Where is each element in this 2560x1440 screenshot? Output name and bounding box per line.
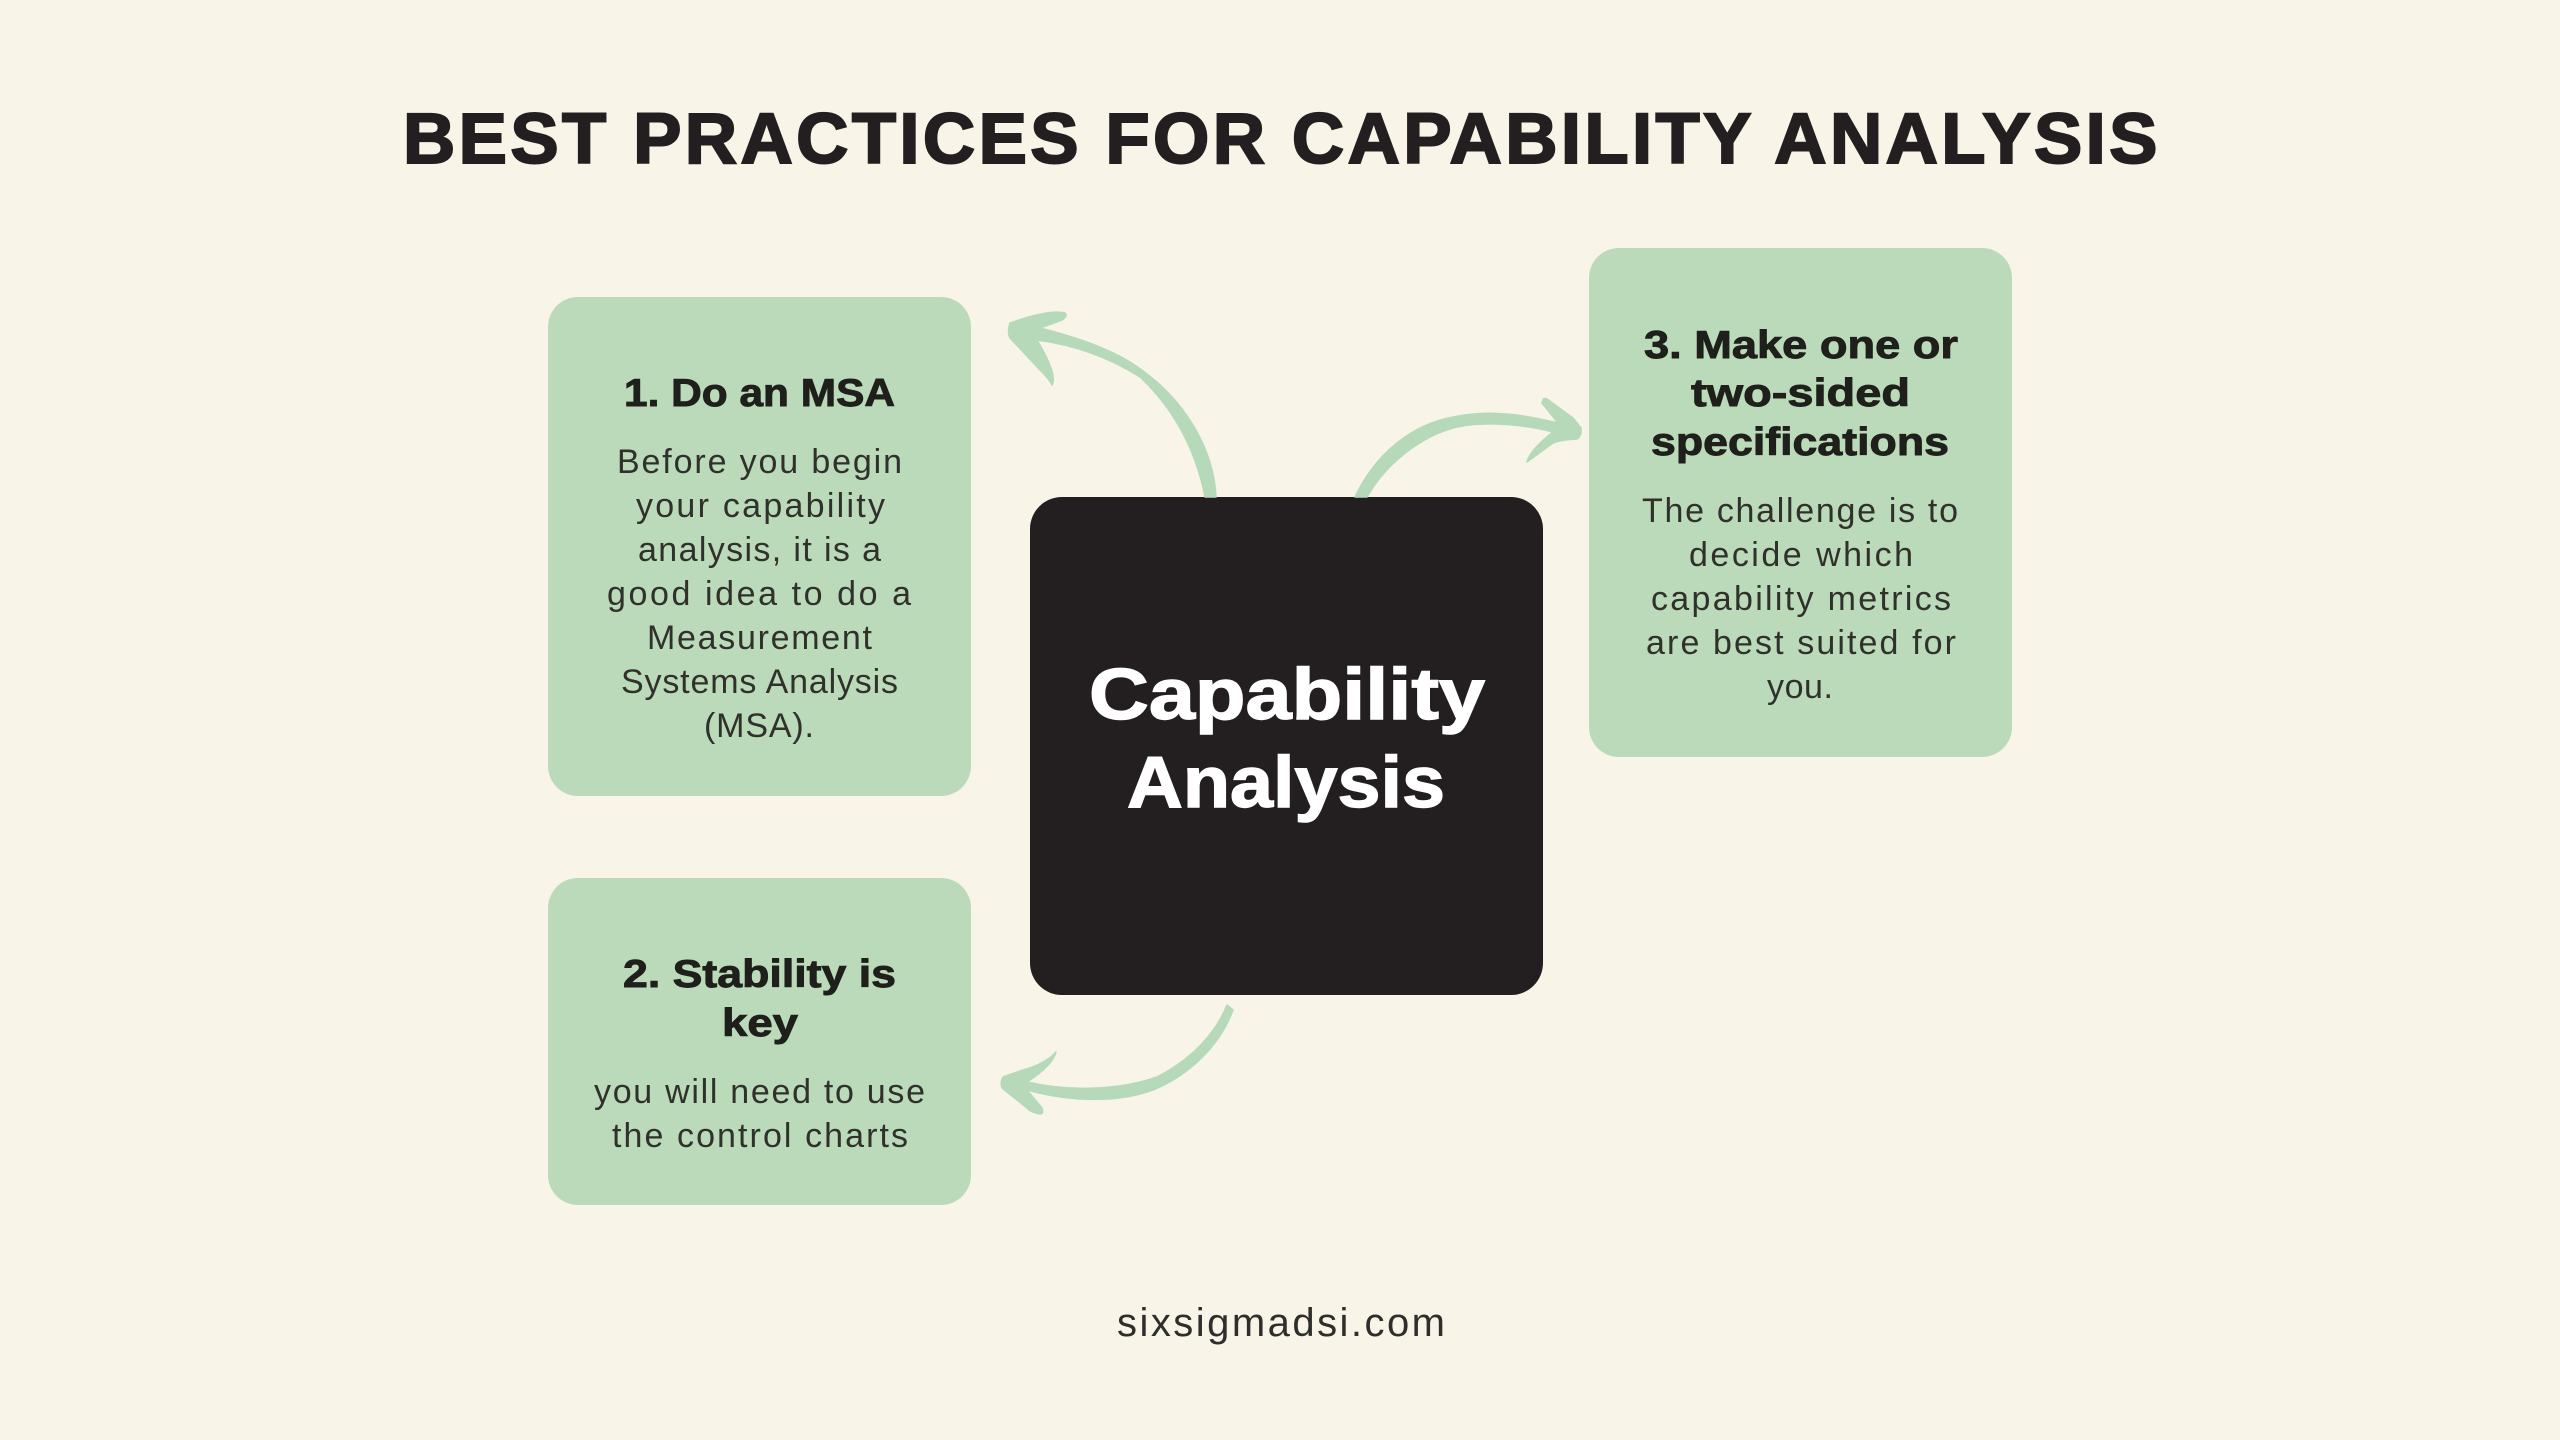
heading: card 2: key <box>722 1002 798 1045</box>
text block: card 3 body: are best suited for <box>1646 624 1956 662</box>
heading: card 3 <box>1644 324 1958 464</box>
panel: central Capability Analysis <box>1030 497 1543 995</box>
heading: central label <box>1089 655 1485 823</box>
heading: central label: Capability <box>1089 655 1485 735</box>
text block: card 1 body: (MSA). <box>704 707 814 745</box>
text block: card 3 body: you. <box>1767 668 1833 706</box>
text block: card 2 body: you will need to use <box>594 1073 925 1111</box>
panel: 1. Do an MSA <box>548 297 971 796</box>
text block: card 2 body: the control charts <box>612 1117 908 1155</box>
text block: card 1 body: Before you begin <box>617 443 902 481</box>
panel: 2. Stability is key <box>548 878 971 1205</box>
text block: card 2 body <box>594 1073 925 1155</box>
heading: card 2 <box>623 953 896 1045</box>
arrow: to card 3 <box>1355 398 1581 497</box>
text block: card 1 body <box>607 443 911 745</box>
text block: card 3 body <box>1642 492 1958 706</box>
text block: card 1 body: your capability <box>636 487 885 525</box>
heading: card 3: specifications <box>1651 421 1949 464</box>
text block: card 3 body: capability metrics <box>1651 580 1951 618</box>
heading: card 3: two-sided <box>1691 372 1910 415</box>
text block: card 3 body: decide which <box>1689 536 1913 574</box>
text block: card 1 body: Measurement <box>647 619 873 657</box>
text block: card 1 body: good idea to do a <box>607 575 911 613</box>
heading: card 3: 3. Make one or <box>1644 324 1958 367</box>
text block: card 1 body: analysis, it is a <box>638 531 881 569</box>
heading: card 2: 2. Stability is <box>623 953 896 996</box>
text block: card 1 body: Systems Analysis <box>621 663 898 701</box>
footer url: sixsigmadsi.com <box>1117 1301 1445 1345</box>
heading: card 1: 1. Do an MSA <box>624 372 895 415</box>
panel: 3. Make one or two-sided specifications <box>1589 248 2012 757</box>
arrow: to card 1 <box>1008 312 1216 497</box>
arrow: to card 2 <box>1001 1005 1233 1114</box>
text block: card 3 body: The challenge is to <box>1642 492 1958 530</box>
heading: central label: Analysis <box>1127 743 1445 823</box>
title: BEST PRACTICES FOR CAPABILITY ANALYSIS <box>403 100 2157 179</box>
